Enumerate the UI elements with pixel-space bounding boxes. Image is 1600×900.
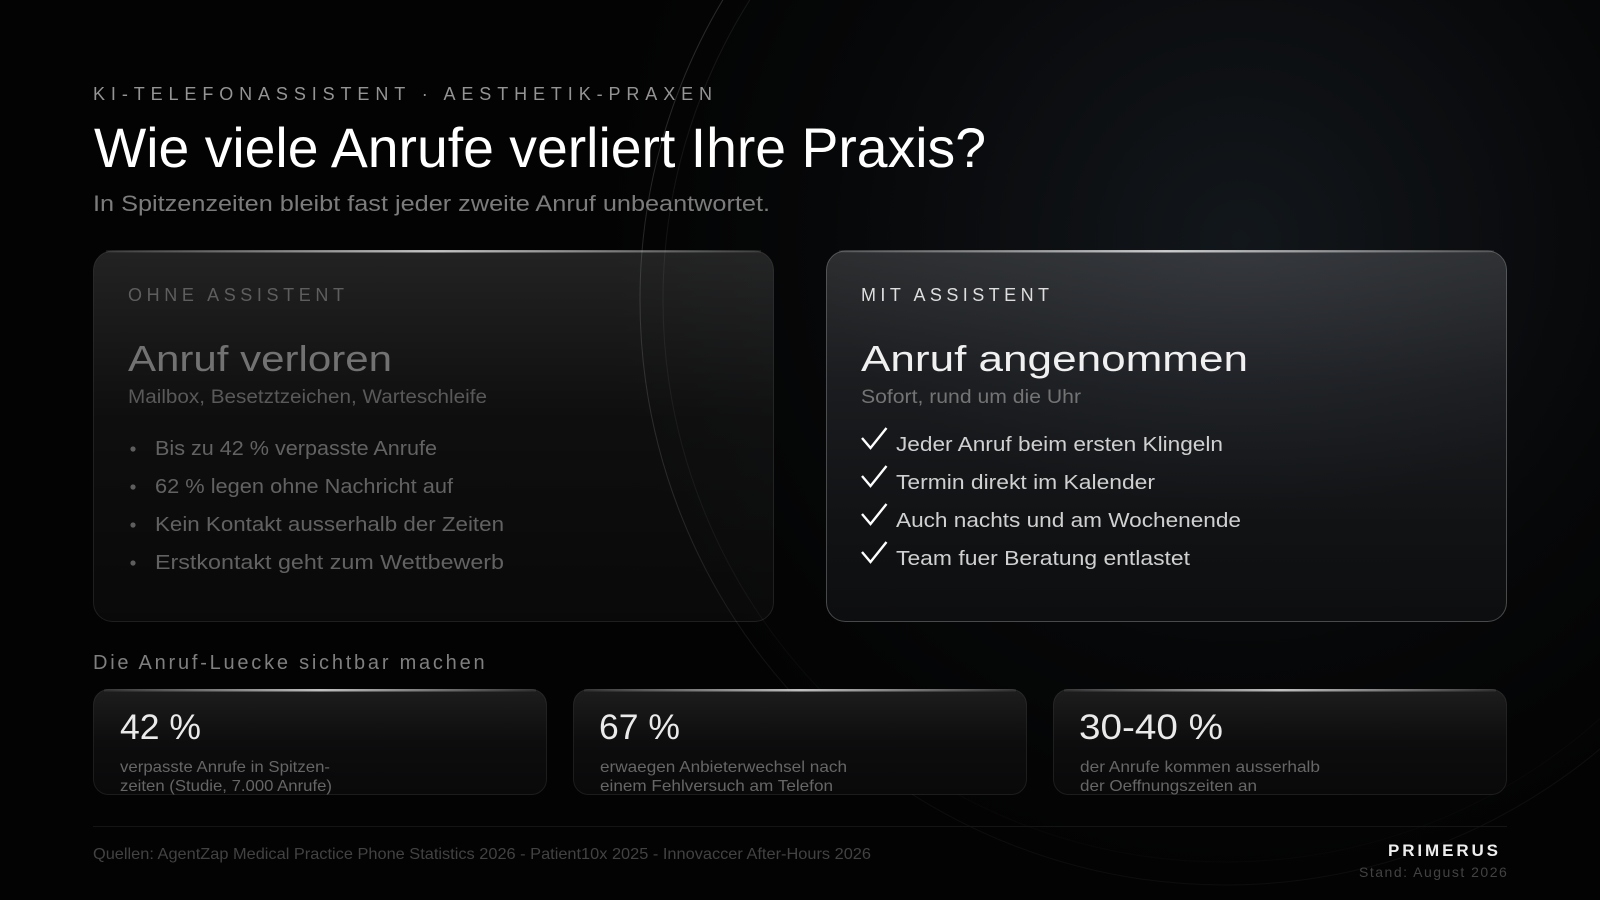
panel: ohne assistent [94,250,774,622]
panel heading: Anruf verloren [128,338,392,379]
panel: mit assistent [826,250,1506,622]
panel subheading: Sofort, rund um die Uhr [861,387,1082,408]
panel label: MIT ASSISTENT [861,285,1052,305]
sources: Quellen: AgentZap Medical Practice Phone Statistics 2026 - Patient10x 2025 - Innovaccer After-Hours 2026 [93,846,871,863]
subtitle: In Spitzenzeiten bleibt fast jeder zweite Anruf unbeantwortet. [93,191,770,216]
panel heading: Anruf angenommen [861,338,1248,379]
section heading: Die Anruf-Luecke sichtbar machen [93,652,486,674]
stat description [120,759,332,795]
list: problems: Erstkontakt geht zum Wettbewerb [155,552,504,574]
stat card: 30-40 % [1054,689,1506,795]
stat description: erwaegen Anbieterwechsel nach [600,759,847,776]
icon: check [862,466,886,486]
list: benefits: Auch nachts und am Wochenende [896,510,1241,532]
list: problems: Kein Kontakt ausserhalb der Zeiten [155,514,504,536]
list: benefits [862,428,1241,570]
stat description: einem Fehlversuch am Telefon [600,778,833,795]
list: problems [130,438,504,574]
list: benefits: Jeder Anruf beim ersten Klingeln [896,434,1223,456]
stat description: zeiten (Studie, 7.000 Anrufe) [120,778,332,795]
stat description [600,760,846,791]
panel subheading: Mailbox, Besetztzeichen, Warteschleife [128,387,487,408]
stat description: der Oeffnungszeiten an [1080,778,1257,795]
footer [93,841,1508,880]
stat description: verpasste Anrufe in Spitzen- [120,759,330,776]
brand: PRIMERUS [1388,841,1500,860]
stat card: 42 % [94,689,546,795]
stat description: der Anrufe kommen ausserhalb [1080,759,1320,776]
icon: check [862,428,886,448]
header [93,84,986,216]
list: problems: Bis zu 42 % verpasste Anrufe [155,438,437,460]
date: Stand: August 2026 [1359,864,1508,880]
list: problems: 62 % legen ohne Nachricht auf [155,476,453,498]
stat value: 42 % [120,708,201,747]
stat value: 67 % [599,708,680,747]
stat card: 67 % [574,689,1026,795]
eyebrow: KI-TELEFONASSISTENT · AESTHETIK-PRAXEN [93,84,717,104]
panel label: OHNE ASSISTENT [128,285,347,305]
list: benefits: Team fuer Beratung entlastet [896,548,1190,570]
icon: check [862,542,886,562]
title: Wie viele Anrufe verliert Ihre Praxis? [94,116,986,179]
stat description [1080,759,1320,795]
list: benefits: Termin direkt im Kalender [896,472,1155,494]
stat value: 30-40 % [1079,708,1223,747]
icon: check [862,504,886,524]
